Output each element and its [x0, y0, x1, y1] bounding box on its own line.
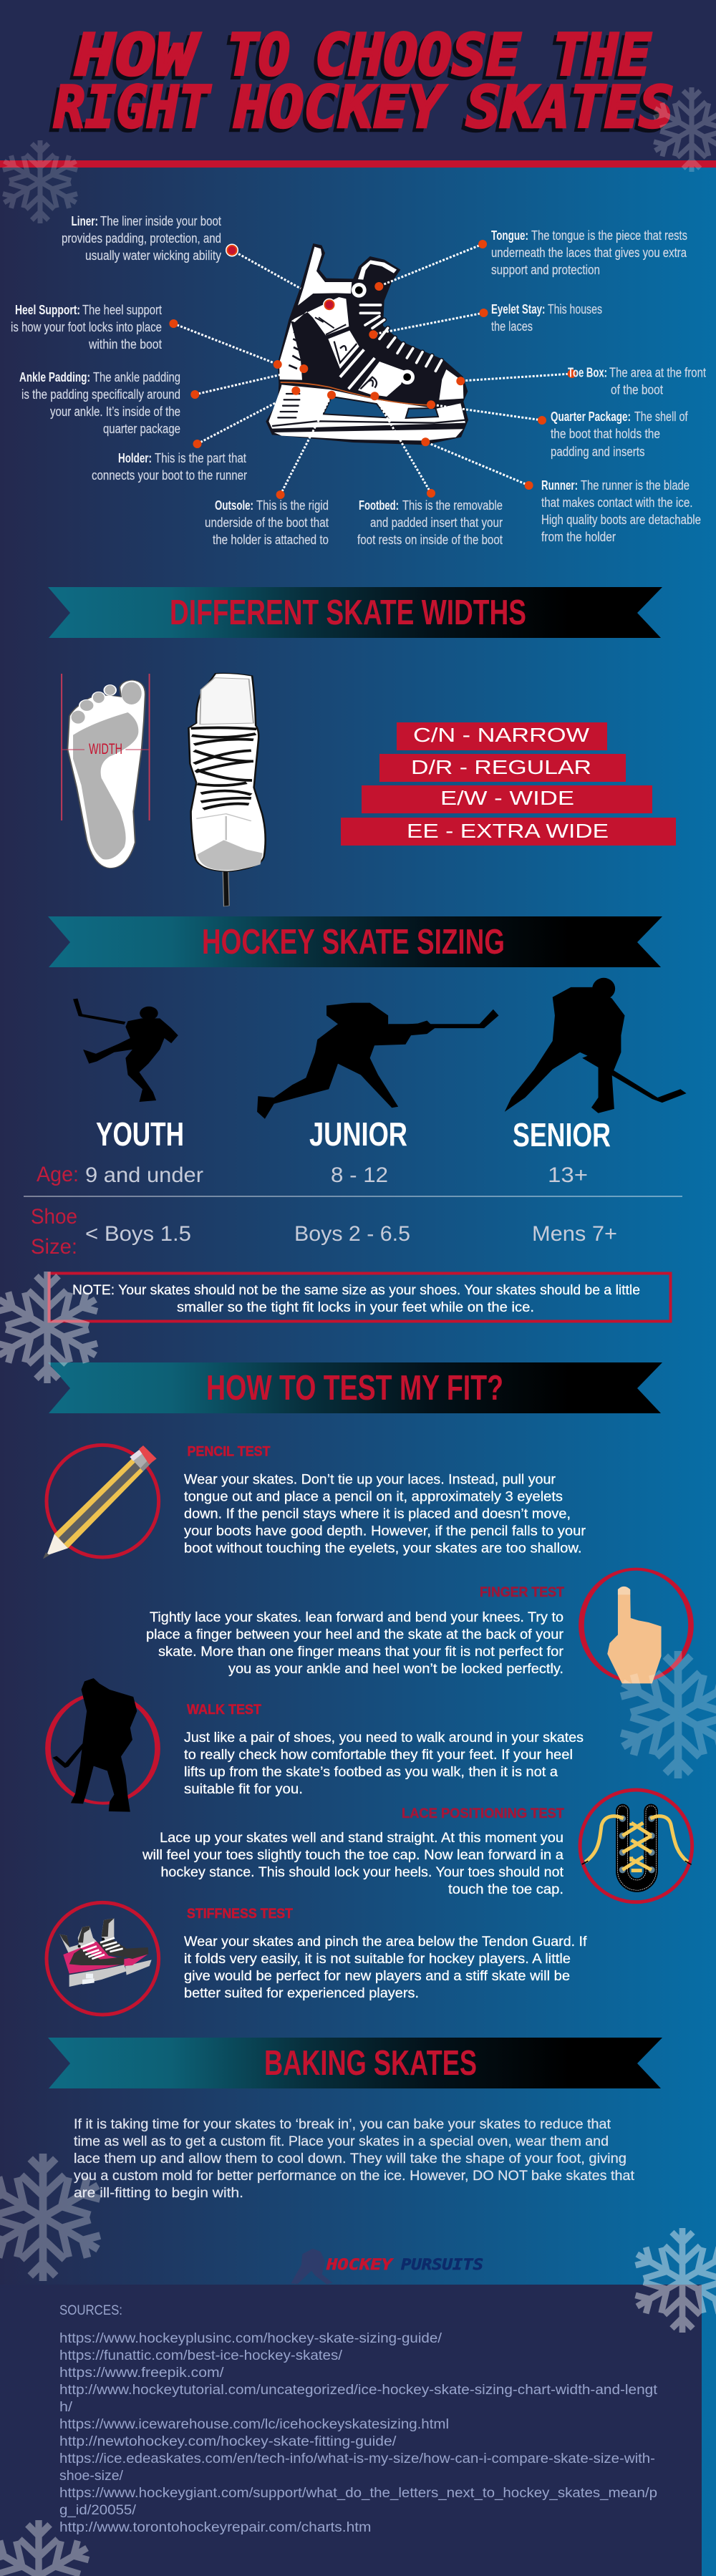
sizing table: Age:	[37, 1163, 79, 1186]
label: heel support: The heel support	[82, 303, 162, 317]
body: walk test: to really check how comfortable they fit your feet. If your heel	[184, 1748, 573, 1763]
body: baking skates: are ill-fitting to begin with.	[74, 2186, 243, 2201]
banner: how to test my fit	[48, 1362, 662, 1413]
body: baking skates	[74, 2117, 635, 2201]
body: pencil test: tongue out and place a pencil on it, approximately 3 eyelets	[184, 1490, 563, 1505]
sources: https://www.icewarehouse.com/lc/icehockeyskatesizing.html	[59, 2417, 449, 2432]
body: finger test	[146, 1610, 564, 1677]
label: liner: provides padding, protection, and	[62, 231, 221, 246]
sources band	[0, 2285, 702, 2576]
sources: http://www.hockeytutorial.com/uncategorized/ice-hockey-skate-sizing-chart-width-and-lengt	[59, 2383, 658, 2398]
snowflake: bottom left	[0, 2154, 109, 2281]
title: THE	[549, 26, 648, 92]
label: runner: The runner is the blade	[581, 478, 690, 493]
illustration: skate top view	[188, 673, 266, 906]
heading: lace positioning test: LACE POSITIONING TEST	[402, 1806, 564, 1821]
title: SKATES	[463, 77, 670, 145]
label: toe box: of the boot	[611, 382, 663, 397]
label: tongue	[491, 228, 687, 277]
body: walk test: suitable fit for you.	[184, 1782, 303, 1797]
banner: different skate widths	[48, 587, 662, 638]
body: baking skates: you a custom mold for better performance on the ice. However, DO NOT bake skates that	[74, 2169, 635, 2184]
logo: hockey pursuits: HOCKEY	[326, 2256, 394, 2273]
body: finger test: skate. More than one finger means that your fit is not perfect for	[158, 1645, 564, 1660]
label: eyelet stay: the laces	[491, 319, 533, 334]
sources: g_id/20055/	[59, 2503, 137, 2518]
note callout	[49, 1273, 670, 1322]
sources	[59, 2303, 658, 2535]
body: finger test: Tightly lace your skates. lean forward and bend your knees. Try to	[150, 1610, 563, 1625]
label: heel support: Heel Support:	[15, 303, 80, 317]
label: quarter package: Quarter Package:	[551, 410, 631, 424]
label: liner: usually water wicking ability	[85, 248, 221, 263]
sizing table	[24, 1115, 682, 1259]
label: holder: Holder:	[118, 451, 152, 465]
snowflake: bottom right	[628, 2228, 716, 2333]
body: baking skates: lace them up and allow them to cool down. They will take the shape of your foot, giving	[74, 2151, 626, 2166]
header band	[0, 0, 716, 164]
sources: https://www.hockeygiant.com/support/what_do_the_letters_next_to_hockey_skates_mean/p	[59, 2486, 657, 2501]
label: quarter package	[551, 410, 688, 459]
sources: http://www.torontohockeyrepair.com/charts.htm	[59, 2520, 371, 2535]
sources: SOURCES:	[59, 2303, 122, 2318]
icon: skates pair	[47, 1902, 159, 2015]
label: footbed	[357, 498, 503, 547]
title: RIGHT	[54, 74, 212, 140]
body: stiffness test: give would be perfect for new players and a stiff skate will be	[184, 1969, 570, 1984]
title: SKATES	[466, 74, 674, 140]
silhouette: senior player	[505, 978, 687, 1113]
heading: stiffness test: STIFFNESS TEST	[187, 1907, 293, 1922]
body: baking skates: If it is taking time for your skates to ‘break in’, you can bake your skates to reduce that	[74, 2117, 611, 2132]
body: finger test: place a finger between your heel and the skate at the back of your	[146, 1627, 564, 1642]
callout markers	[169, 240, 576, 499]
body: finger test: you as your ankle and heel won’t be locked perfectly.	[228, 1662, 563, 1677]
body: lace positioning test	[142, 1831, 564, 1897]
label: outsole	[205, 498, 329, 547]
body: walk test: lifts up from the skate’s footbed as you walk, then it is not a	[184, 1765, 558, 1780]
label: footbed: Footbed:	[359, 498, 399, 513]
icon: lace	[580, 1790, 692, 1902]
label: quarter package: padding and inserts	[551, 445, 644, 459]
banner: hockey skate sizing	[48, 916, 662, 967]
sources: https://funattic.com/best-ice-hockey-skates/	[59, 2348, 343, 2363]
body: pencil test: your boots have good depth. However, if the pencil falls to your	[184, 1524, 586, 1539]
sources: https://www.hockeyplusinc.com/hockey-skate-sizing-guide/	[59, 2331, 442, 2346]
title: RIGHT	[50, 77, 208, 145]
body: pencil test: boot without touching the eyelets, your skates are too shallow.	[184, 1541, 581, 1556]
body: stiffness test: it folds very easily, it is not suitable for hockey players. A little	[184, 1952, 571, 1967]
label: outsole: the holder is attached to	[213, 533, 329, 547]
banner: different skate widths: DIFFERENT SKATE WIDTHS	[170, 594, 526, 632]
label: ankle padding	[19, 370, 180, 436]
label: toe box	[568, 365, 706, 397]
label: ankle padding: is the padding specifically around	[21, 387, 180, 402]
banner: how to test my fit: HOW TO TEST MY FIT?	[206, 1369, 503, 1408]
title: CHOOSE	[311, 26, 518, 92]
label: heel support: within the boot	[88, 337, 162, 352]
sources: https://ice.edeaskates.com/en/tech-info/what-is-my-size/how-can-i-compare-skate-size-with-	[59, 2451, 655, 2466]
sources: http://newtohockey.com/hockey-skate-fitting-guide/	[59, 2434, 397, 2449]
body: stiffness test	[184, 1935, 587, 2001]
body: lace positioning test: hockey stance. This should lock your heels. Your toes should not	[160, 1865, 564, 1880]
header red rule	[0, 160, 716, 168]
label: footbed: This is the removable	[402, 498, 503, 513]
note callout: NOTE: Your skates should not be the same size as your shoes. Your skates should be a little	[72, 1283, 640, 1298]
label: outsole: Outsole:	[215, 498, 253, 513]
heading: pencil test: PENCIL TEST	[188, 1445, 271, 1459]
label: ankle padding: your ankle. It’s inside of the	[50, 405, 180, 419]
title: TO	[227, 21, 290, 89]
body: stiffness test: better suited for experienced players.	[184, 1986, 419, 2001]
sources: https://www.freepik.com/	[59, 2366, 224, 2381]
label: runner: that makes contact with the ice.	[541, 495, 693, 510]
title	[50, 21, 674, 145]
sizing table: SENIOR	[513, 1116, 611, 1153]
silhouette: youth player	[73, 999, 178, 1102]
label: liner: The liner inside your boot	[100, 214, 221, 228]
width chart: EE - EXTRA WIDE	[407, 820, 609, 842]
label: footbed: foot rests on inside of the boot	[357, 533, 503, 547]
sizing table: Mens 7+	[532, 1222, 617, 1246]
title: CHOOSE	[315, 21, 521, 89]
label: toe box: Toe Box:	[568, 365, 607, 379]
sizing table: YOUTH	[96, 1115, 184, 1153]
title: HOCKEY	[233, 74, 448, 140]
silhouette: junior player	[257, 1003, 498, 1119]
logo: hockey pursuits: PURSUITS	[401, 2256, 483, 2273]
snowflake: top left	[0, 140, 83, 223]
label: holder	[92, 451, 247, 483]
label: liner	[62, 214, 221, 263]
sizing table: 8 - 12	[331, 1163, 388, 1187]
label: outsole: underside of the boot that	[205, 515, 329, 530]
title: HOW	[74, 21, 201, 89]
label: liner: Liner:	[72, 214, 98, 228]
label: eyelet stay: Eyelet Stay:	[491, 302, 546, 316]
label: runner: Runner:	[541, 478, 578, 493]
body: lace positioning test: Lace up your skates well and stand straight. At this moment you	[160, 1831, 563, 1846]
label: eyelet stay	[491, 302, 602, 334]
body: stiffness test: Wear your skates and pinch the area below the Tendon Guard. If	[184, 1935, 587, 1950]
label: eyelet stay: This houses	[548, 302, 602, 316]
note callout: smaller so the tight fit locks in your feet while on the ice.	[177, 1300, 534, 1315]
body: pencil test: Wear your skates. Don’t tie up your laces. Instead, pull your	[184, 1473, 556, 1488]
icon: walking player	[48, 1678, 158, 1812]
icon: finger	[581, 1569, 691, 1683]
sizing table: < Boys 1.5	[85, 1222, 191, 1246]
snowflake: top right	[648, 87, 716, 172]
body: baking skates: time as well as to get a custom fit. Place your skates in a special oven, wear them and	[74, 2134, 609, 2149]
label: ankle padding: quarter package	[103, 422, 180, 436]
width label: WIDTH	[89, 741, 122, 757]
label: runner	[541, 478, 701, 544]
label: holder: connects your boot to the runner	[92, 468, 247, 483]
width chart: D/R - REGULAR	[411, 756, 591, 778]
label: heel support	[11, 303, 162, 352]
sizing table: Boys 2 - 6.5	[294, 1222, 410, 1246]
title: HOCKEY	[230, 77, 444, 145]
snowflake: right	[612, 1651, 716, 1778]
banner: baking skates	[48, 2038, 662, 2088]
snowflake: footer left	[0, 2520, 97, 2576]
label: ankle padding: The ankle padding	[93, 370, 180, 384]
callout leader lines	[173, 244, 572, 495]
diagram: foot width	[62, 674, 150, 868]
banner: baking skates: BAKING SKATES	[264, 2044, 477, 2083]
body: pencil test: down. If the pencil stays where it is placed and doesn’t move,	[184, 1507, 571, 1522]
sizing table: Shoe	[31, 1205, 77, 1229]
label: tongue: support and protection	[491, 263, 600, 277]
label: runner: from the holder	[541, 530, 616, 544]
title: TO	[223, 26, 286, 92]
label: ankle padding: Ankle Padding:	[19, 370, 90, 384]
width chart: C/N - NARROW	[413, 724, 590, 746]
label: holder: This is the part that	[155, 451, 246, 465]
title: THE	[553, 21, 652, 89]
body: pencil test	[184, 1473, 586, 1556]
body: lace positioning test: touch the toe cap.	[448, 1882, 563, 1897]
sources: shoe-size/	[59, 2469, 124, 2484]
label: tongue: Tongue:	[491, 228, 528, 243]
sizing table: JUNIOR	[309, 1115, 407, 1153]
heading: walk test: WALK TEST	[187, 1703, 261, 1718]
body: lace positioning test: will feel your toes slightly touch the toe cap. Now lean forward in a	[142, 1848, 563, 1863]
sources: h/	[59, 2400, 73, 2415]
label: footbed: and padded insert that your	[370, 515, 503, 530]
heading: finger test: FINGER TEST	[480, 1585, 564, 1600]
logo: hockey pursuits	[291, 2249, 483, 2285]
title: HOW	[71, 26, 198, 92]
sizing table: 9 and under	[85, 1163, 203, 1187]
sizing table: 13+	[548, 1163, 588, 1187]
width chart	[341, 722, 676, 846]
width chart: E/W - WIDE	[440, 787, 574, 809]
label: quarter package: The shell of	[634, 410, 688, 424]
label: heel support: is how your foot locks into place	[11, 320, 162, 334]
body: walk test	[184, 1730, 584, 1797]
snowflake: note left	[0, 1272, 105, 1383]
body: walk test: Just like a pair of shoes, you need to walk around in your skates	[184, 1730, 584, 1745]
illustration: hockey skate	[266, 243, 468, 445]
label: outsole: This is the rigid	[256, 498, 329, 513]
label: quarter package: the boot that holds the	[551, 427, 660, 441]
icon: pencil	[43, 1445, 159, 1559]
sizing table: Size:	[31, 1235, 77, 1259]
banner: hockey skate sizing: HOCKEY SKATE SIZING	[202, 923, 505, 962]
